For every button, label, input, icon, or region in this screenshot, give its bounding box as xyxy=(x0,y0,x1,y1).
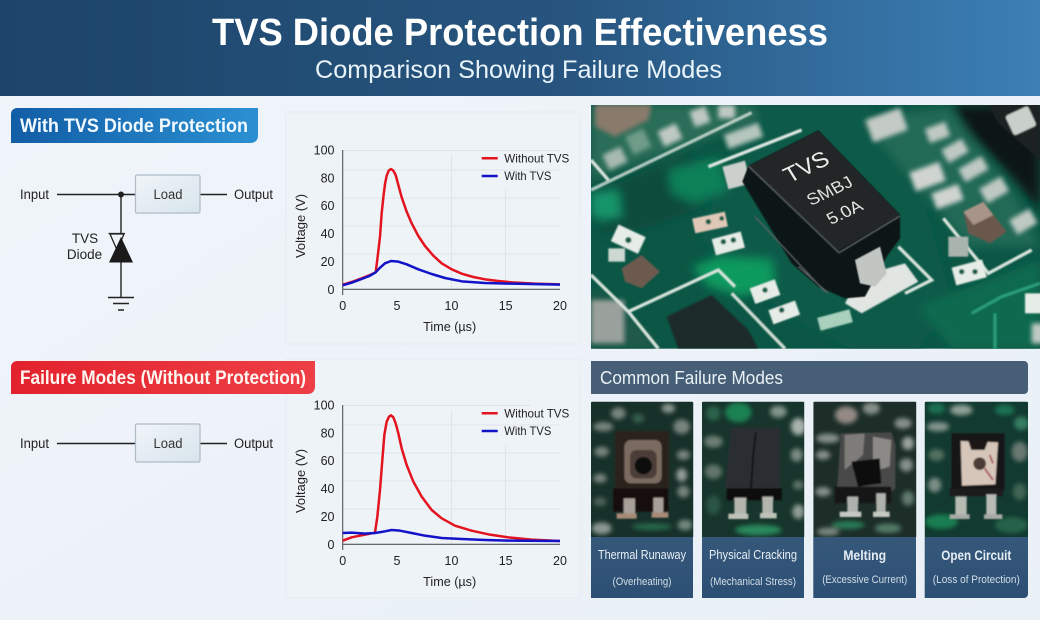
load box: Load xyxy=(154,187,182,202)
y axis labels: 80 xyxy=(321,171,335,185)
photo: TVS diode on green circuit board xyxy=(591,105,1040,349)
legend xyxy=(482,406,569,438)
photo: cracked diode xyxy=(702,402,806,538)
panel: with TVS diode protection circuit xyxy=(11,108,273,310)
y axis labels: 0 xyxy=(328,283,335,297)
load box xyxy=(136,175,200,213)
x axis labels xyxy=(339,299,567,313)
small capacitors xyxy=(622,255,660,288)
y axis labels: 60 xyxy=(321,454,335,468)
caption: (Mechanical Stress) xyxy=(710,576,796,588)
x axis labels: 10 xyxy=(445,554,458,568)
curve: with TVS xyxy=(343,261,560,285)
y axis labels: 40 xyxy=(321,227,335,241)
caption: (Loss of Protection) xyxy=(933,574,1020,586)
axis title: voltage: Voltage (V) xyxy=(294,194,308,258)
circuit diagram with TVS diode xyxy=(20,175,273,310)
icon: TVS SMB chip xyxy=(742,131,900,298)
x axis labels: 20 xyxy=(553,554,567,568)
icon: TVS SMB chip: 5.0A xyxy=(823,196,867,228)
circuit diagram with TVS diode: Diode xyxy=(67,247,102,262)
x axis labels: 5 xyxy=(394,554,401,568)
x axis labels: 10 xyxy=(445,299,458,313)
caption: Physical Cracking xyxy=(709,547,797,562)
y axis labels xyxy=(314,144,335,297)
icon: TVS SMB chip: TVS xyxy=(779,146,834,187)
icon: ground xyxy=(108,298,134,310)
x axis labels xyxy=(339,554,567,568)
heading: failure modes without protection xyxy=(11,361,315,394)
y axis labels: 0 xyxy=(328,538,335,552)
x axis labels: 0 xyxy=(339,554,346,568)
circuit diagram with TVS diode: Input xyxy=(20,187,49,202)
title: TVS Diode Protection Effectiveness xyxy=(212,12,828,54)
icon: TVS diode symbol xyxy=(108,234,133,262)
curve: without TVS xyxy=(343,169,560,285)
legend: Without TVS xyxy=(504,152,569,166)
y axis labels: 20 xyxy=(321,255,335,269)
photo: burnt diode with crater xyxy=(591,402,693,538)
x axis labels: 0 xyxy=(339,299,346,313)
y axis labels: 100 xyxy=(314,144,335,158)
card: open circuit xyxy=(925,402,1029,598)
legend: With TVS xyxy=(504,424,551,438)
y axis labels: 60 xyxy=(321,199,335,213)
x axis labels: 5 xyxy=(394,299,401,313)
card: thermal runaway xyxy=(591,402,693,598)
caption xyxy=(925,537,1028,598)
card: physical cracking xyxy=(702,402,806,598)
circuit diagram without protection xyxy=(20,424,273,462)
subtitle: Comparison Showing Failure Modes xyxy=(315,56,722,84)
dark lower chip xyxy=(667,295,758,349)
load box: Load xyxy=(154,436,182,451)
axis title: voltage: Voltage (V) xyxy=(294,449,308,513)
x axis labels: 20 xyxy=(553,299,567,313)
caption: Melting xyxy=(843,548,886,563)
y axis labels: 100 xyxy=(314,398,335,412)
panel: voltage chart with TVS xyxy=(286,112,580,344)
axis title: time: Time (µs) xyxy=(423,320,476,334)
y axis labels xyxy=(314,398,335,552)
y axis labels: 20 xyxy=(321,510,335,524)
caption: Thermal Runaway xyxy=(598,547,686,562)
caption: Open Circuit xyxy=(941,548,1012,563)
card: melting xyxy=(813,402,916,598)
solder pads xyxy=(608,212,1040,331)
load box xyxy=(136,424,200,462)
axes xyxy=(343,405,560,550)
x axis labels: 15 xyxy=(499,299,513,313)
x axis labels: 15 xyxy=(499,554,513,568)
legend: With TVS xyxy=(504,169,551,183)
caption: (Excessive Current) xyxy=(822,574,907,586)
icon: TVS SMB chip: SMBJ xyxy=(803,172,856,209)
curve: without TVS xyxy=(343,415,560,541)
caption: (Overheating) xyxy=(612,576,672,588)
legend xyxy=(482,152,569,183)
heading: with TVS diode protection: With TVS Diode Protection xyxy=(20,116,248,137)
caption xyxy=(702,537,804,598)
panel: voltage chart without protection xyxy=(286,359,580,598)
heading: common failure modes xyxy=(591,361,1028,394)
axis title: time: Time (µs) xyxy=(423,575,476,589)
y axis labels: 80 xyxy=(321,426,335,440)
photo: melted diode xyxy=(813,402,916,538)
axes xyxy=(343,150,560,295)
panel: common failure modes xyxy=(591,361,1029,598)
curve: with TVS xyxy=(343,530,560,541)
heading: failure modes without protection: Failure Modes (Without Protection) xyxy=(20,368,306,389)
heading: common failure modes: Common Failure Modes xyxy=(600,368,783,388)
title banner xyxy=(0,0,1040,96)
heading: with TVS diode protection xyxy=(11,108,258,143)
y axis labels: 40 xyxy=(321,482,335,496)
circuit diagram without protection: Input xyxy=(20,436,49,451)
caption xyxy=(591,537,693,598)
circuit diagram with TVS diode: Output xyxy=(234,187,273,202)
photo: blown-open diode xyxy=(925,402,1029,538)
caption xyxy=(813,537,916,598)
circuit diagram with TVS diode: TVS xyxy=(72,231,98,246)
circuit diagram without protection: Output xyxy=(234,436,273,451)
legend: Without TVS xyxy=(504,406,569,420)
panel: failure modes circuit without protection xyxy=(11,361,315,462)
